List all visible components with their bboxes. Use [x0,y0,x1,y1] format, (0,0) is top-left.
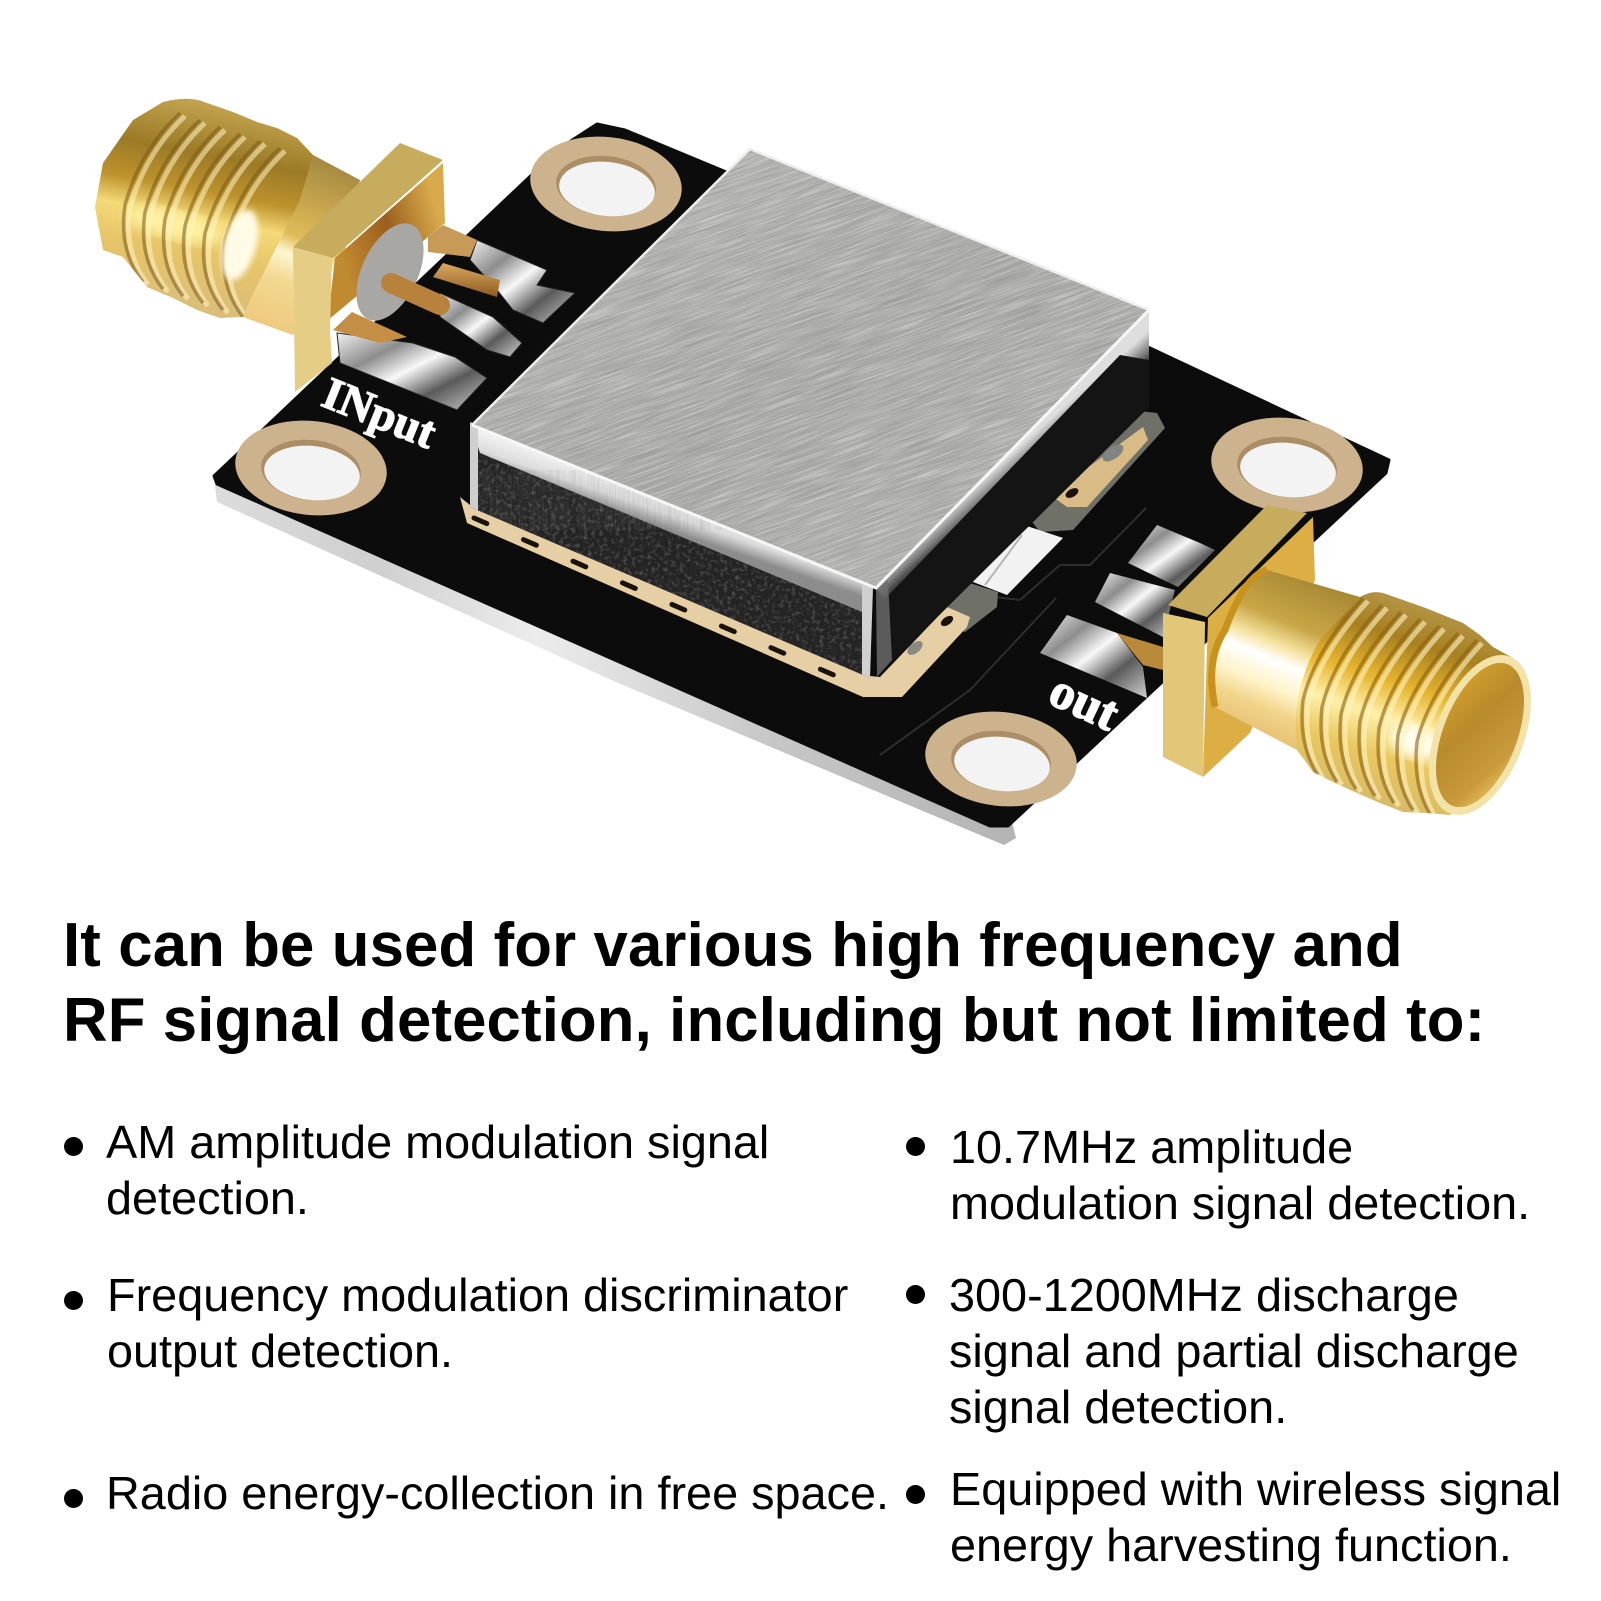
centre pin and solder pad [391,283,522,357]
heading: It can be used for various high frequency and [63,911,1403,980]
right connector flange back [1203,517,1315,777]
shield can side right [876,310,1149,677]
mounting hole bottom [921,704,1081,814]
right connector bore [1409,641,1551,829]
left connector highlight [215,206,265,284]
page: Equipped with wireless signal [950,1463,1561,1515]
PCB trace lines [880,508,1146,755]
PCB board [214,124,1389,826]
heading [63,911,1485,1055]
upper solder pad [428,225,575,323]
left connector thread [95,98,313,318]
right SMA connector [1212,570,1551,829]
gold pad upper right with grey halo [1025,410,1165,532]
right connector flange front [1163,505,1307,777]
white capacitor component [935,522,1063,632]
INput label: INput [315,367,444,459]
bullet: 10.7MHz [906,1121,1530,1229]
page: detection. [106,1172,309,1224]
bullet: AM amplitude modulation [64,1116,769,1224]
right solder pads [1040,525,1215,698]
left SMA connector [80,90,360,335]
left connector flange [293,143,445,392]
shield can side left [470,422,873,678]
out label: out [1041,661,1128,742]
bullet: radio energy collection [64,1467,889,1519]
page: Frequency modulation discriminator [107,1269,848,1321]
bullet: wireless energy harvesting [906,1463,1561,1571]
left connector neck [243,155,360,335]
shield can top [471,148,1150,590]
page: signal detection. [949,1381,1287,1433]
mounting hole right [1207,410,1367,520]
bullet: frequency modulation discriminator [64,1269,848,1377]
right connector thread [1296,592,1514,815]
product photo: RF detector module [95,98,1531,845]
mounting hole top left [526,129,686,239]
right connector neck [1212,570,1360,750]
mounting hole left [231,413,391,523]
page: 10.7MHz amplitude [950,1121,1353,1173]
page: signal and partial discharge [949,1325,1519,1377]
gold strip under shield [460,497,970,697]
page: AM amplitude modulation signal [106,1116,769,1168]
page: 300-1200MHz discharge [949,1269,1459,1321]
teflon insulator disc [343,213,437,331]
page: energy harvesting function. [950,1519,1512,1571]
page: modulation signal detection. [950,1177,1530,1229]
page: output detection. [107,1325,453,1377]
PCB silver edge [214,478,1016,845]
bullet: 300-1200MHz [906,1269,1519,1433]
heading: RF signal detection, including but not limited to: [63,986,1485,1055]
lower solder pad [333,312,487,410]
page: Radio energy-collection in free space. [106,1467,889,1519]
